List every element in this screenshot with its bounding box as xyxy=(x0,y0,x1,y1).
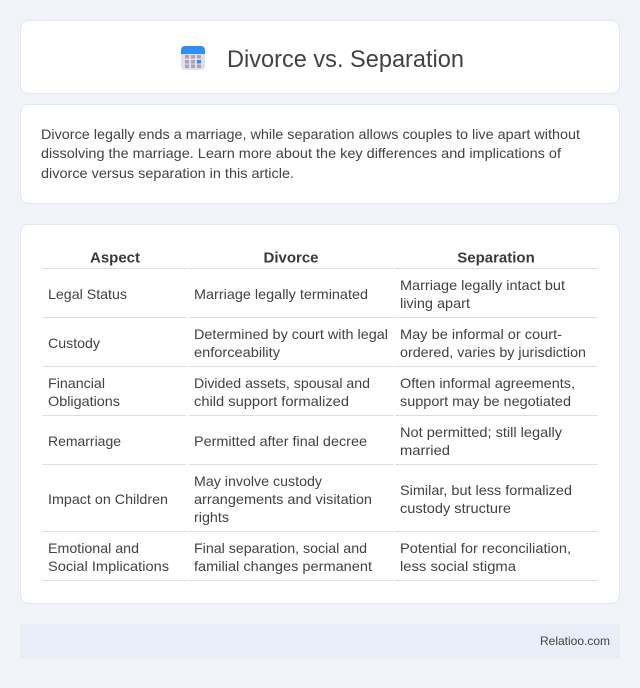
table header xyxy=(43,250,597,269)
row: legal status: Marriage legally intact but xyxy=(400,277,565,293)
row: financial obligations: child support formalized xyxy=(194,393,349,409)
row: impact on children: Similar, but less formalized xyxy=(400,482,572,498)
row: impact on children: custody structure xyxy=(400,500,511,516)
row: emotional and social implications: less social stigma xyxy=(400,558,516,574)
row: impact on children: Impact on Children xyxy=(48,491,168,507)
row: custody: Determined by court with legal xyxy=(194,326,388,342)
row: impact on children: rights xyxy=(194,509,229,525)
row: remarriage: married xyxy=(400,442,450,458)
row: emotional and social implications: Social Implications xyxy=(48,558,169,574)
row: financial obligations: Financial xyxy=(48,375,105,391)
row: emotional and social implications: Emotional and xyxy=(48,540,139,556)
row: financial obligations: Divided assets, spousal and xyxy=(194,375,370,391)
row: emotional and social implications xyxy=(43,540,597,581)
row: legal status: living apart xyxy=(400,295,470,311)
row: financial obligations xyxy=(43,375,597,416)
row: emotional and social implications: Potential for reconciliation, xyxy=(400,540,571,556)
footer bar xyxy=(20,624,620,658)
row: custody: Custody xyxy=(48,335,100,351)
row: custody: enforceability xyxy=(194,344,280,360)
row: legal status xyxy=(43,277,597,318)
row: legal status: Marriage legally terminated xyxy=(194,286,368,302)
row: financial obligations: Often informal agreements, xyxy=(400,375,575,391)
row: remarriage: Permitted after final decree xyxy=(194,433,367,449)
table header: Separation xyxy=(457,250,535,266)
row: emotional and social implications: Final separation, social and xyxy=(194,540,367,556)
row: custody: May be informal or court- xyxy=(400,326,562,342)
row: custody: ordered, varies by jurisdiction xyxy=(400,344,586,360)
panel: title xyxy=(20,20,620,94)
panel: introduction xyxy=(20,104,620,204)
intro text xyxy=(41,126,580,181)
row: impact on children xyxy=(43,473,597,532)
intro text: divorce versus separation in this article. xyxy=(41,165,294,181)
row: financial obligations: Obligations xyxy=(48,393,120,409)
table header: Aspect xyxy=(90,250,140,266)
footer text: Relatioo.com xyxy=(540,634,610,648)
row: custody xyxy=(43,326,597,367)
row: emotional and social implications: familial changes permanent xyxy=(194,558,372,574)
table header: Divorce xyxy=(263,250,319,266)
row: remarriage: Not permitted; still legally xyxy=(400,424,562,440)
row: financial obligations: support may be negotiated xyxy=(400,393,571,409)
row: remarriage xyxy=(43,424,597,465)
icon: calendar xyxy=(181,46,205,70)
panel: comparison table xyxy=(20,224,620,604)
title text: Divorce vs. Separation xyxy=(227,46,464,73)
row: impact on children: arrangements and visitation xyxy=(194,491,372,507)
intro text: Divorce legally ends a marriage, while separation allows couples to live apart without xyxy=(41,126,580,142)
row: impact on children: May involve custody xyxy=(194,473,322,489)
row: legal status: Legal Status xyxy=(48,286,127,302)
intro text: dissolving the marriage. Learn more about the key differences and implications of xyxy=(41,145,561,161)
row: remarriage: Remarriage xyxy=(48,433,121,449)
